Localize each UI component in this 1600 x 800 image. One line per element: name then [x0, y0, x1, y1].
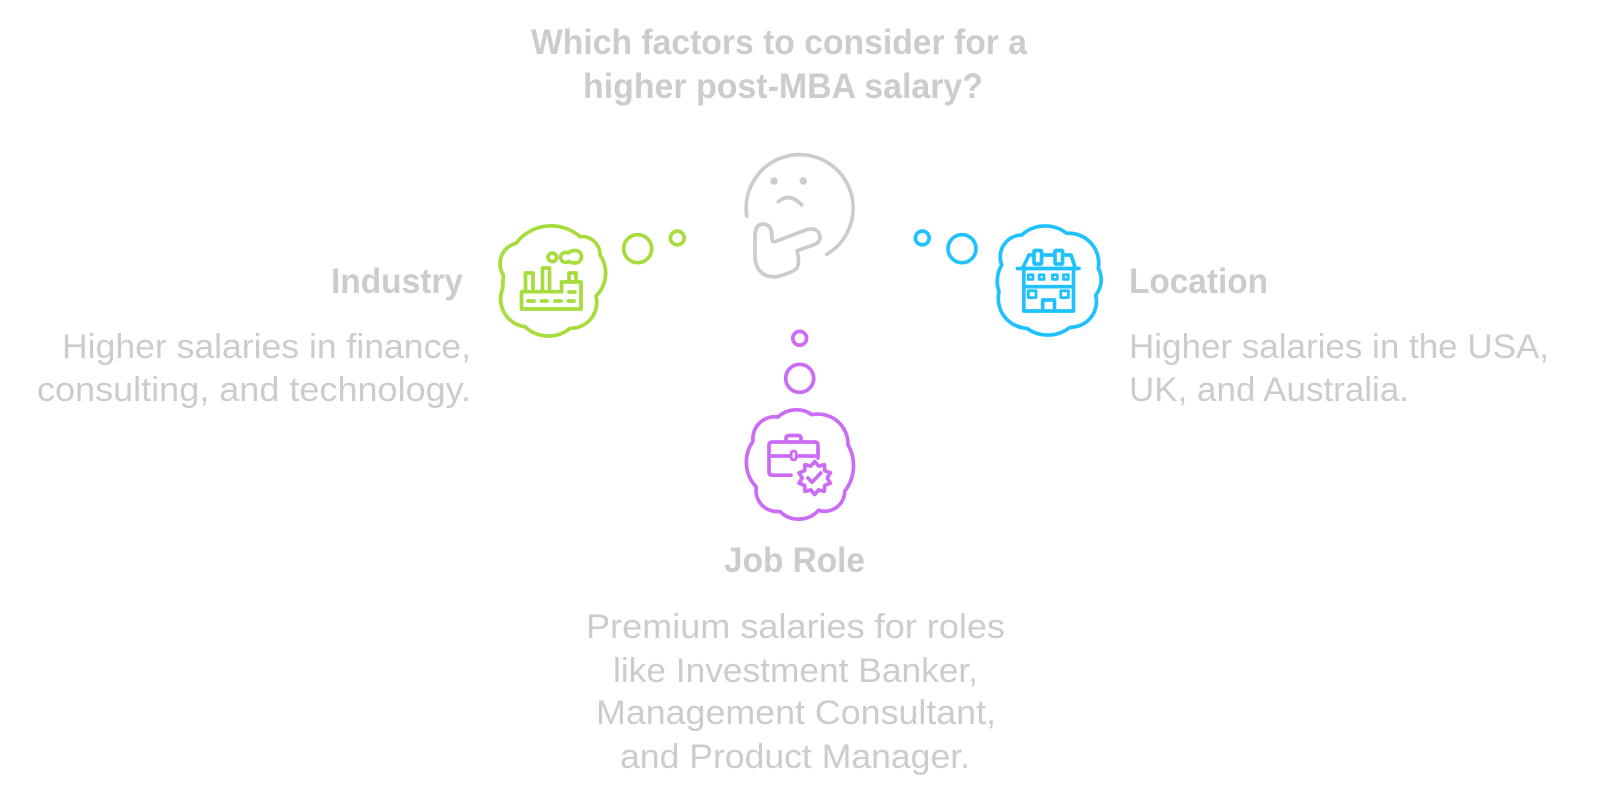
text: industry description: Higher salaries in finance,: [62, 328, 471, 366]
icon: building in cloud: [997, 226, 1101, 335]
panel: location: [915, 226, 1549, 409]
text: industry description: [37, 328, 471, 409]
icon: factory in cloud: [500, 226, 606, 336]
thought bubbles: location: [915, 231, 976, 263]
text: job role description: like Investment Banker,: [613, 652, 978, 690]
text: location description: UK, and Australia.: [1129, 371, 1409, 409]
heading: Location: Location: [1129, 262, 1268, 301]
thought bubbles: industry: [624, 231, 684, 263]
panel: job role: [586, 331, 1005, 776]
thought bubbles: job role: [786, 331, 814, 392]
text: job role description: and Product Manager.: [620, 738, 970, 776]
title: higher post-MBA salary?: [583, 67, 983, 106]
icon: thinking face: [746, 155, 853, 277]
heading: Industry: Industry: [331, 262, 464, 301]
text: industry description: consulting, and technology.: [37, 371, 471, 409]
text: location description: Higher salaries in the USA,: [1129, 328, 1549, 366]
icon: briefcase with badge in cloud: [746, 410, 854, 519]
text: job role description: Management Consultant,: [596, 694, 996, 732]
text: job role description: Premium salaries for roles: [586, 608, 1005, 646]
panel: industry: [37, 226, 684, 409]
text: location description: [1129, 328, 1549, 409]
heading: Job Role: Job Role: [724, 541, 865, 580]
text: job role description: [586, 608, 1005, 776]
title: [531, 23, 1028, 106]
title: Which factors to consider for a: [531, 23, 1028, 62]
